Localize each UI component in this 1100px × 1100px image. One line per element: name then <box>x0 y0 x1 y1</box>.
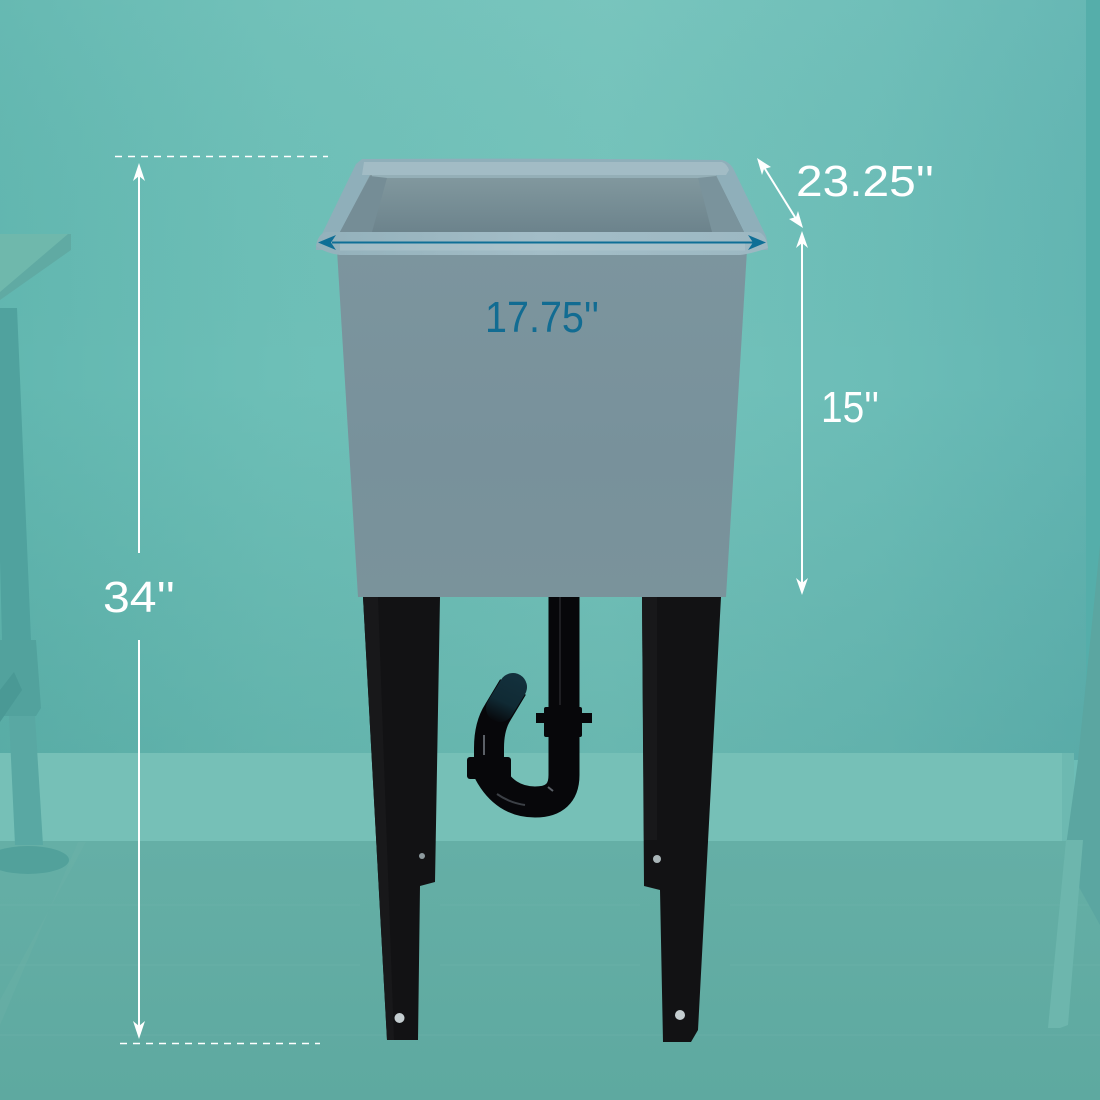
dimension: depth 23.25: 23.25'' <box>796 157 934 206</box>
sink <box>316 159 768 1042</box>
background: floor <box>0 841 1100 1100</box>
sink: left leg <box>363 597 440 1040</box>
dimension: basin height 15 <box>796 231 879 595</box>
background: chair at right <box>1048 545 1100 1028</box>
background: baseboard <box>0 753 1074 842</box>
sink: front rim <box>316 232 768 255</box>
dimension: basin height 15: 15'' <box>821 383 879 432</box>
background: table at left <box>0 234 71 874</box>
sink: drain pipe <box>467 597 592 805</box>
sink: right leg <box>642 597 721 1042</box>
sink: rear rim <box>316 159 768 250</box>
sink: basin body <box>337 250 747 597</box>
dimension: depth 23.25 <box>757 157 934 228</box>
sink: basin interior <box>340 175 744 232</box>
dimension: total height 34 <box>103 156 328 1044</box>
background: wall <box>0 0 1100 760</box>
dimension: width 17.75 <box>318 235 766 342</box>
dimension: width 17.75: 17.75'' <box>485 293 599 342</box>
dimension: total height 34: 34'' <box>103 573 175 622</box>
